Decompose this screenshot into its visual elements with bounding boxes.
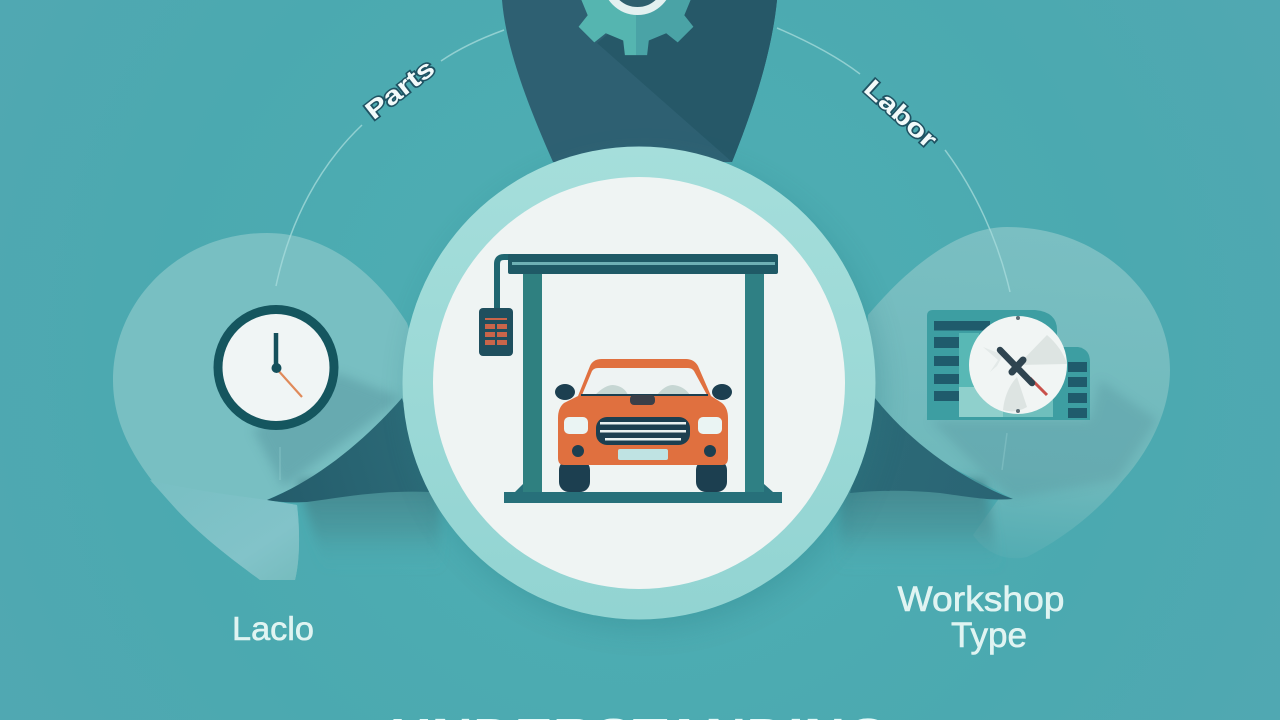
lift cable	[497, 257, 520, 310]
schedule panels	[927, 310, 1057, 420]
windshield	[582, 368, 707, 395]
car mirrors	[555, 384, 732, 400]
left wedge shade	[297, 480, 440, 570]
icon: schedule with clock	[927, 310, 1090, 420]
label: Labor: Labor	[858, 74, 943, 154]
fog lights	[572, 445, 716, 457]
label: Workshop Type: Workshop	[898, 580, 1064, 619]
car wheels	[559, 460, 727, 492]
main circle shadow	[409, 156, 881, 628]
lift base	[504, 484, 782, 503]
license plate	[618, 449, 668, 460]
icon: car lift	[479, 254, 782, 503]
label: Workshop Type	[898, 580, 1064, 655]
right clock shadow	[939, 386, 1153, 494]
right wedge shade	[840, 480, 1000, 570]
icon: gear	[566, 0, 706, 55]
panel: top pin	[502, 0, 777, 162]
right wedge	[850, 398, 1013, 500]
panel: left teardrop	[113, 233, 440, 580]
icon: orange car	[555, 359, 732, 492]
clock wedges	[983, 335, 1067, 411]
panel: right teardrop	[840, 227, 1170, 570]
left tail highlight	[150, 480, 299, 580]
label: Workshop Type: Type	[951, 616, 1027, 655]
lift top beam	[508, 254, 778, 274]
schedule rows	[934, 321, 1087, 418]
left clock shadow	[253, 373, 402, 487]
label: Parts: Parts	[360, 54, 440, 125]
clock face	[969, 316, 1067, 414]
clock hands	[1030, 378, 1047, 395]
left wedge	[267, 398, 430, 502]
main circle	[402, 146, 876, 620]
lift control box	[479, 308, 513, 356]
second hand	[276, 368, 302, 397]
label: Laclo: Laclo	[232, 610, 314, 647]
headlights	[564, 417, 722, 434]
seats	[595, 385, 690, 395]
minute hand	[274, 333, 278, 368]
right lobe	[860, 227, 1170, 558]
car body	[558, 359, 728, 465]
arc connectors	[276, 28, 1010, 480]
lift right column	[745, 274, 764, 494]
grille	[596, 417, 690, 445]
pin diagonal shade	[597, 0, 777, 162]
left lobe	[113, 233, 440, 580]
hood badge	[630, 395, 655, 405]
icon: left clock	[218, 310, 334, 426]
lift left column	[523, 274, 542, 494]
